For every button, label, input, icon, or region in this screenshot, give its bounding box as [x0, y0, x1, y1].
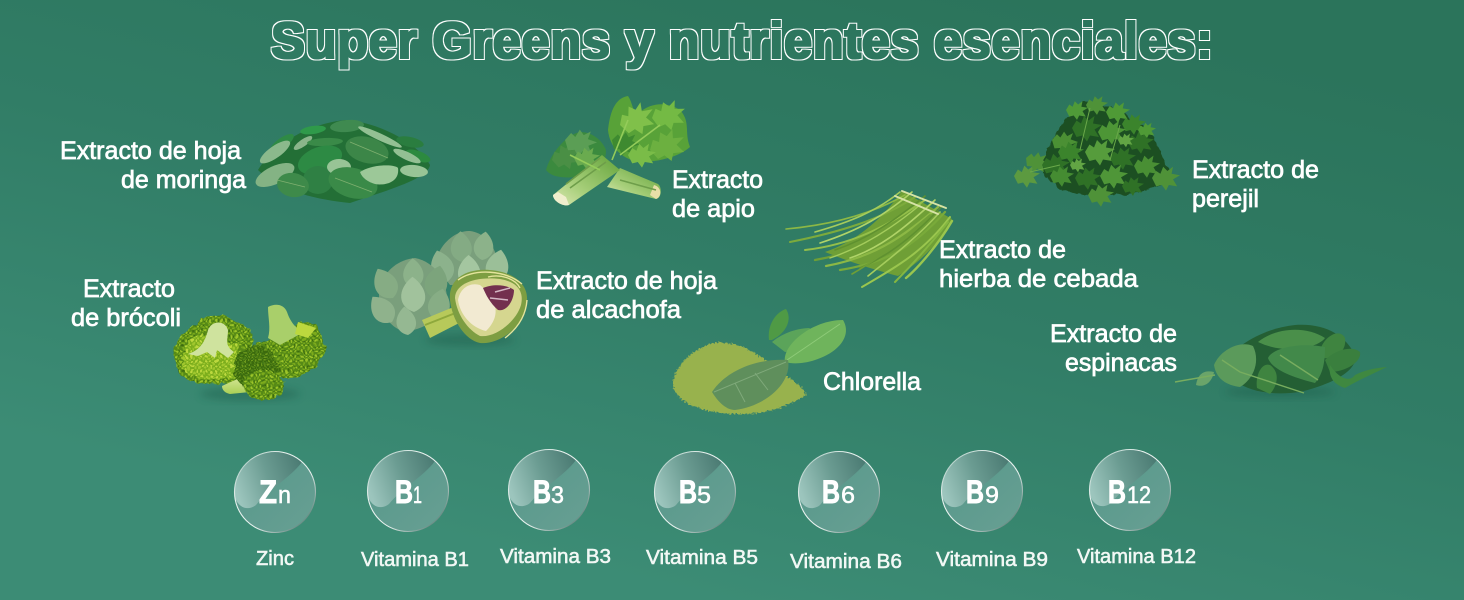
nutrient: zinc: [234, 452, 316, 570]
badge: B12: B: [1108, 474, 1126, 510]
label: hierba de cebada: [939, 236, 1138, 293]
label: moringa: Extracto de hoja: [60, 137, 241, 165]
ingredient: brócoli: [71, 275, 325, 401]
label: apio: Extracto: [672, 166, 763, 194]
badge: B9: [942, 450, 1022, 532]
nutrient: vitamina B9: [936, 450, 1048, 571]
label: moringa: de moringa: [121, 166, 246, 194]
label: vitamina B6: Vitamina B6: [790, 550, 902, 573]
label: espinacas: [1050, 320, 1177, 377]
nutrient: vitamina B12: [1077, 450, 1196, 568]
label: brócoli: de brócoli: [71, 304, 181, 332]
image: broccoli: [174, 305, 325, 401]
badge: B9: B: [966, 474, 984, 510]
badge: B6: 6: [841, 482, 855, 509]
badge: Zn: n: [278, 482, 291, 509]
label: vitamina B9: Vitamina B9: [936, 548, 1048, 571]
label: alcachofa: Extracto de hoja: [536, 267, 717, 295]
label: perejil: perejil: [1192, 185, 1259, 213]
label: vitamina B5: Vitamina B5: [646, 546, 758, 569]
image: spinach: [1175, 325, 1387, 398]
badge: B5: 5: [697, 482, 711, 509]
ingredient: chlorella: [673, 309, 921, 414]
badge: B1: [368, 450, 448, 532]
label: vitamina B12: Vitamina B12: [1077, 545, 1196, 568]
nutrient: vitamina B1: [361, 450, 469, 571]
badge: Zn: [234, 452, 316, 532]
ingredient: moringa: [60, 119, 432, 204]
nutrient: vitamina B6: [790, 452, 902, 573]
label: apio: de apio: [672, 195, 755, 223]
badge: B6: [798, 452, 880, 532]
badge: B3: B: [533, 474, 551, 510]
ingredient: espinacas: [1050, 320, 1387, 398]
image: celery: [546, 96, 690, 205]
image: parsley: [1014, 96, 1180, 207]
badge: B5: B: [679, 474, 697, 510]
label: hierba de cebada: Extracto de: [939, 236, 1066, 264]
ingredient: apio: [546, 96, 763, 223]
label: espinacas: espinacas: [1065, 349, 1177, 377]
image: moringa leaves: [252, 119, 432, 204]
image: barley grass: [786, 191, 952, 287]
label: alcachofa: [536, 267, 717, 324]
label: chlorella: Chlorella: [823, 368, 921, 396]
label: brócoli: [71, 275, 181, 332]
badge: B3: 3: [551, 482, 564, 509]
ingredient: alcachofa: [364, 230, 717, 346]
label: hierba de cebada: hierba de cebada: [939, 265, 1138, 293]
label: apio: [672, 166, 763, 223]
ingredient: perejil: [1014, 96, 1319, 213]
nutrient: vitamina B5: [646, 452, 758, 569]
nutrient: vitamina B3: [500, 450, 611, 568]
badge: B1: 1: [413, 482, 422, 509]
image: chlorella powder and leaves: [673, 309, 846, 414]
image: artichoke: [364, 230, 527, 346]
label: zinc: Zinc: [256, 547, 294, 570]
badge: B12: [1090, 450, 1170, 530]
title: Super Greens y nutrientes esenciales:: [271, 12, 1213, 69]
badge: B1: B: [395, 474, 413, 510]
label: brócoli: Extracto: [83, 275, 175, 303]
label: alcachofa: de alcachofa: [536, 296, 681, 324]
badge: B3: [508, 450, 590, 530]
badge: B5: [654, 452, 736, 532]
label: vitamina B3: Vitamina B3: [500, 545, 611, 568]
label: perejil: Extracto de: [1192, 156, 1319, 184]
badge: B12: 12: [1127, 482, 1151, 509]
label: perejil: [1192, 156, 1319, 213]
badge: B6: B: [822, 474, 840, 510]
ingredient: hierba de cebada: [786, 191, 1138, 293]
badge: B9: 9: [985, 482, 999, 509]
label: vitamina B1: Vitamina B1: [361, 548, 469, 571]
label: espinacas: Extracto de: [1050, 320, 1177, 348]
label: moringa: [60, 137, 246, 194]
badge: Zn: Z: [259, 474, 277, 510]
